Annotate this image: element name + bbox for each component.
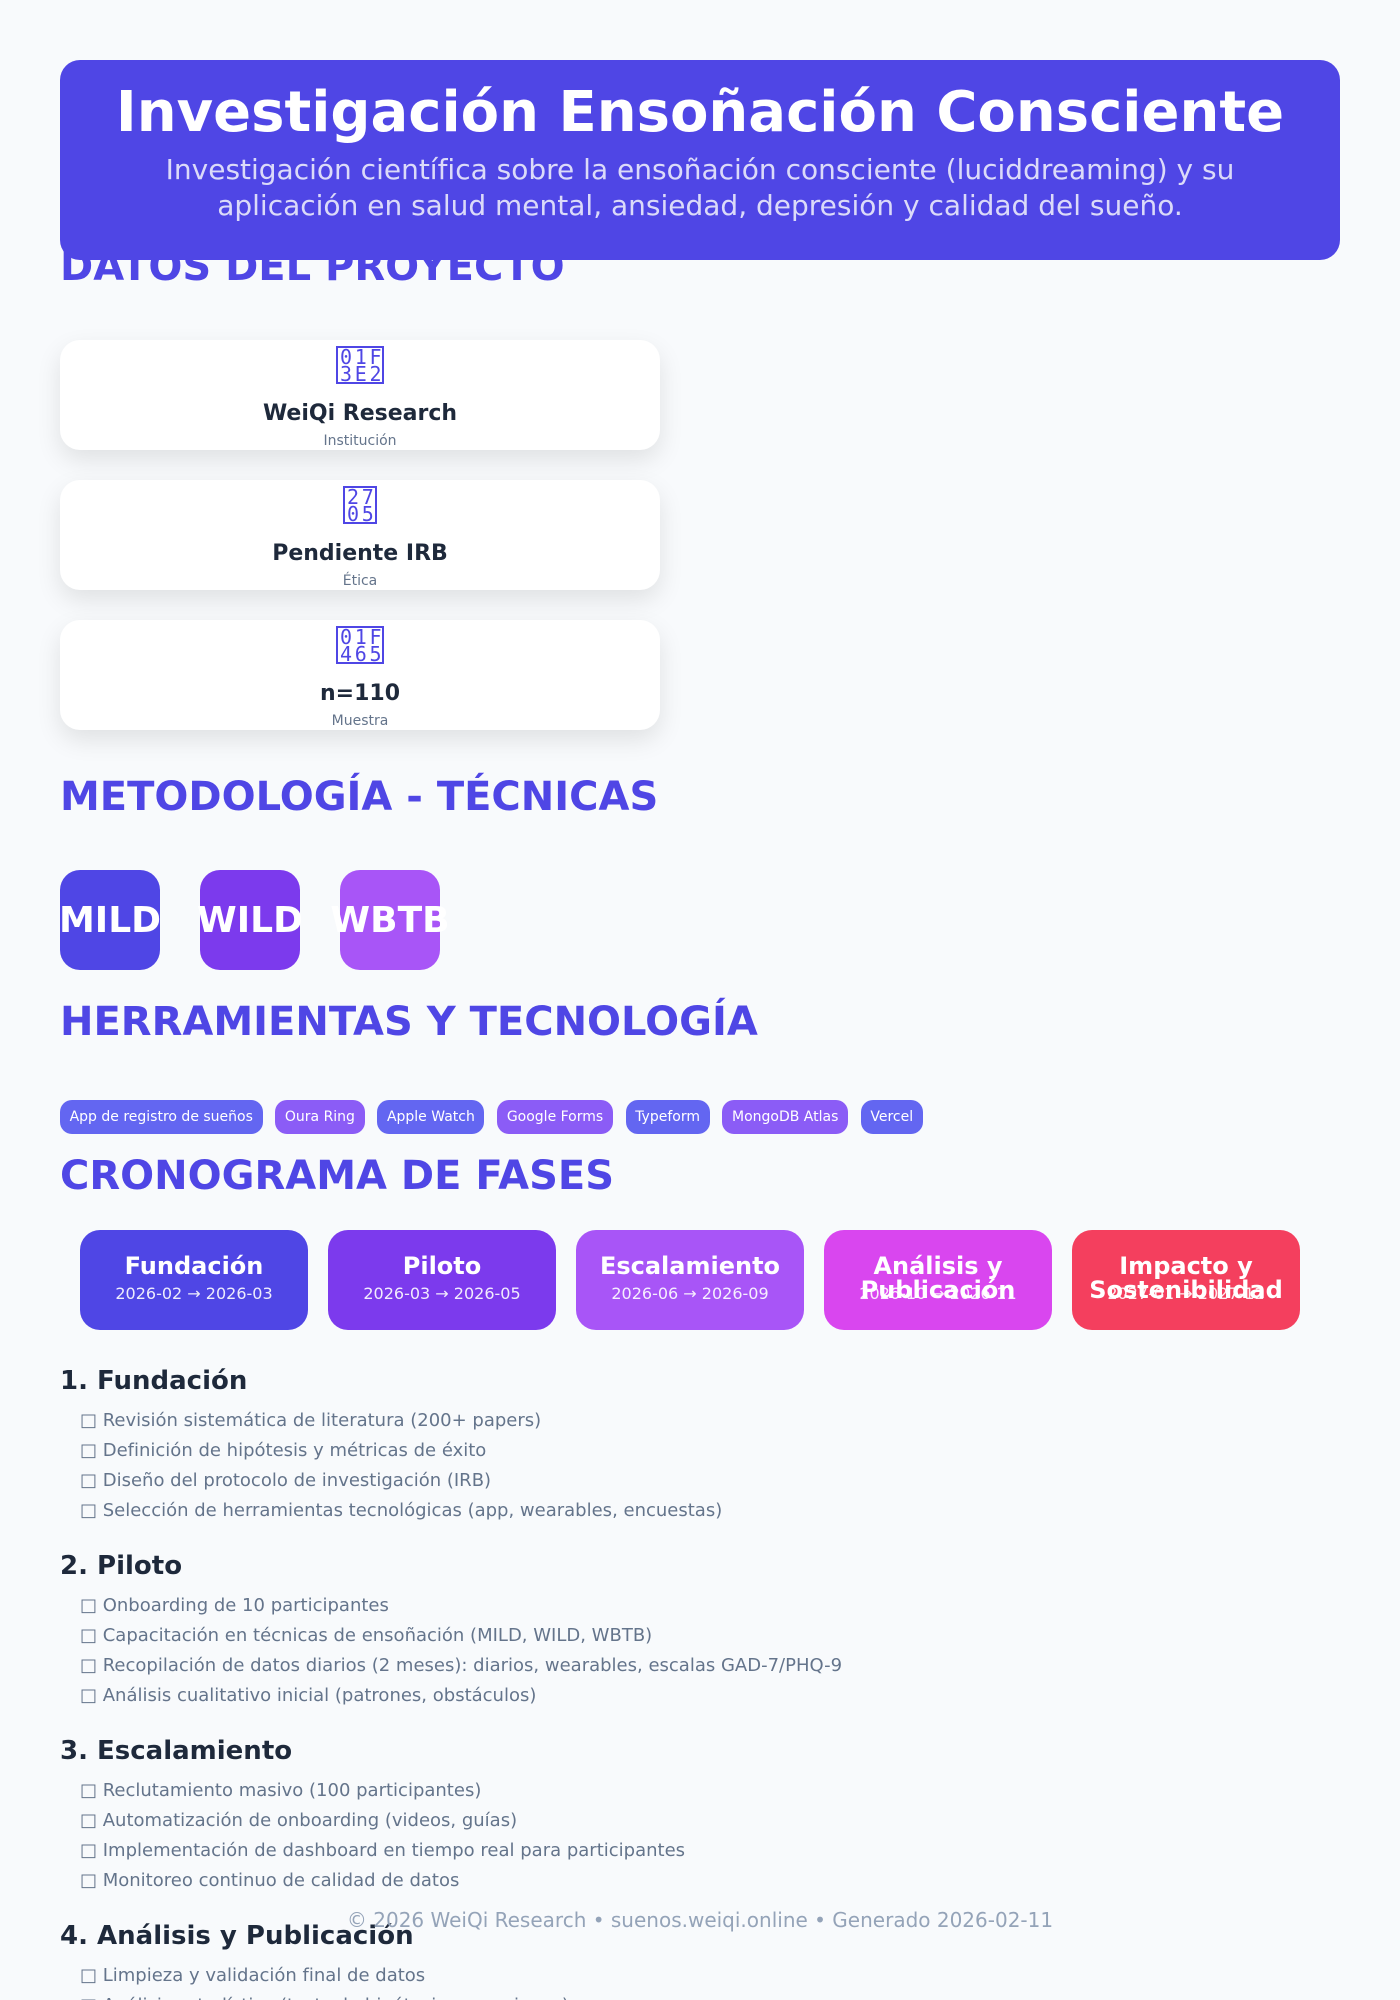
phase dates: 2026-03 → 2026-05: [363, 1284, 521, 1303]
card: institución: [60, 340, 660, 450]
phase detail: 1. Fundación: [60, 1366, 722, 1521]
ethics label: Ética: [343, 573, 377, 589]
phase name: Impacto y Sostenibilidad: [1089, 1252, 1283, 1304]
checklist: □ Análisis cualitativo inicial (patrones, obstáculos): [80, 1685, 536, 1706]
checklist: □ Capacitación en técnicas de ensoñación (MILD, WILD, WBTB): [80, 1625, 652, 1646]
technique: WBTB: WBTB: [330, 900, 450, 941]
icon: missing-glyph box 01F3E2: [336, 346, 384, 384]
phase name: Escalamiento: [600, 1252, 780, 1280]
subtitle: Investigación científica sobre la ensoñación consciente (luciddreaming) y su: [166, 153, 1234, 186]
phase detail: 3. Escalamiento: 3. Escalamiento: [60, 1736, 292, 1766]
phase detail: 3. Escalamiento: [60, 1736, 685, 1891]
phase detail: 4. Análisis y Publicación: 4. Análisis y Publicación: [60, 1921, 414, 1951]
phase detail: 1. Fundación: 1. Fundación: [60, 1366, 247, 1396]
icon: missing-glyph box 01F3E2: 3E2: [340, 362, 384, 386]
section heading: datos del proyecto: DATOS DEL PROYECTO: [60, 244, 565, 290]
institution name: WeiQi Research: [263, 401, 457, 426]
phase: escalamiento: [576, 1230, 804, 1330]
tool pill: oura: [275, 1100, 365, 1134]
checklist: □ Limpieza y validación final de datos: [80, 1965, 425, 1986]
tool pill: apple watch: [377, 1100, 484, 1134]
tool pill: vercel: Vercel: [870, 1109, 913, 1125]
checklist: □ Recopilación de datos diarios (2 meses): diarios, wearables, escalas GAD-7/PHQ-9: [80, 1655, 842, 1676]
section heading: cronograma: CRONOGRAMA DE FASES: [60, 1153, 614, 1199]
header banner: [60, 60, 1340, 260]
phase: análisis y publicación: [824, 1230, 1052, 1330]
icon: missing-glyph box 2705: 27: [347, 485, 376, 509]
phase name: Análisis y Publicación: [861, 1252, 1015, 1304]
technique: WILD: WILD: [197, 900, 303, 941]
tool pill: mongodb: MongoDB Atlas: [732, 1109, 838, 1125]
section heading: herramientas: HERRAMIENTAS Y TECNOLOGÍA: [60, 999, 758, 1045]
card: muestra: [60, 620, 660, 730]
icon: missing-glyph box 01F3E2: 01F: [340, 345, 384, 369]
tool pill: app: [60, 1100, 262, 1134]
tool pill: app: App de registro de sueños: [70, 1109, 253, 1125]
phase: impacto y sostenibilidad: [1072, 1230, 1300, 1330]
checklist: □ Reclutamiento masivo (100 participantes): [80, 1780, 481, 1801]
icon: missing-glyph box 2705: [343, 486, 377, 524]
phase detail: 4. Análisis y Publicación: [60, 1921, 569, 2000]
phase dates: 2026-10 → 2026-11: [859, 1284, 1017, 1303]
checklist: [80, 1595, 842, 1706]
tool pill: typeform: [626, 1100, 710, 1134]
phase name: Piloto: [403, 1252, 481, 1280]
checklist: □ Definición de hipótesis y métricas de éxito: [80, 1440, 486, 1461]
card: ética: [60, 480, 660, 590]
phase detail: 2. Piloto: [60, 1551, 842, 1706]
phase dates: 2026-06 → 2026-09: [611, 1284, 769, 1303]
technique: WILD: [200, 870, 300, 970]
tool pill: mongodb: [722, 1100, 848, 1134]
icon: missing-glyph box 01F465: 465: [340, 642, 384, 666]
ethics status: Pendiente IRB: [272, 541, 448, 566]
technique: MILD: MILD: [59, 900, 161, 941]
checklist: □ Revisión sistemática de literatura (200+ papers): [80, 1410, 541, 1431]
checklist: [80, 1965, 569, 2000]
phase: piloto: [328, 1230, 556, 1330]
subtitle: aplicación en salud mental, ansiedad, depresión y calidad del sueño.: [217, 189, 1183, 222]
tool pills row: [60, 1100, 923, 1134]
phase detail: 2. Piloto: 2. Piloto: [60, 1551, 182, 1581]
checklist: [80, 1410, 722, 1521]
footer: © 2026 WeiQi Research • suenos.weiqi.online • Generado 2026-02-11: [347, 1908, 1053, 1932]
section heading: metodología: METODOLOGÍA - TÉCNICAS: [60, 774, 658, 820]
institution label: Institución: [323, 433, 397, 449]
sample label: Muestra: [332, 713, 388, 729]
icon: missing-glyph box 01F465: [336, 626, 384, 664]
tool pill: vercel: [861, 1100, 923, 1134]
checklist: □ Onboarding de 10 participantes: [80, 1595, 389, 1616]
phase dates: 2027-01 → 2027-12: [1107, 1284, 1265, 1303]
technique: WBTB: [340, 870, 440, 970]
title: Investigación Ensoñación Consciente: [116, 80, 1284, 145]
phase name: Fundación: [125, 1252, 263, 1280]
icon: missing-glyph box 01F465: 01F: [340, 625, 384, 649]
checklist: [80, 1780, 685, 1891]
tool pill: apple watch: Apple Watch: [387, 1109, 475, 1125]
checklist: □ Selección de herramientas tecnológicas (app, wearables, encuestas): [80, 1500, 722, 1521]
sample size: n=110: [320, 681, 400, 706]
checklist: □ Automatización de onboarding (videos, guías): [80, 1810, 517, 1831]
subtitle: [166, 153, 1234, 222]
technique: MILD: [60, 870, 160, 970]
checklist: □ Monitoreo continuo de calidad de datos: [80, 1870, 459, 1891]
tool pill: typeform: Typeform: [635, 1109, 700, 1125]
checklist: □ Diseño del protocolo de investigación (IRB): [80, 1470, 491, 1491]
icon: missing-glyph box 2705: 05: [347, 502, 376, 526]
phase: fundación: [80, 1230, 308, 1330]
tool pill: google forms: Google Forms: [507, 1109, 603, 1125]
phase dates: 2026-02 → 2026-03: [115, 1284, 273, 1303]
checklist: □ Implementación de dashboard en tiempo real para participantes: [80, 1840, 685, 1861]
tool pill: google forms: [497, 1100, 613, 1134]
tool pill: oura: Oura Ring: [285, 1109, 355, 1125]
